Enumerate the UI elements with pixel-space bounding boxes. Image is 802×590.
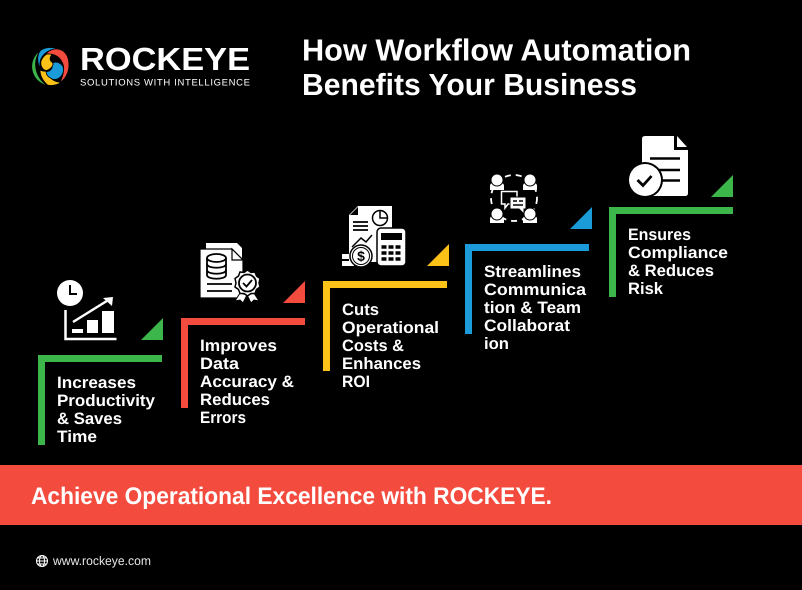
website url: www.rockeye.com (52, 554, 151, 568)
marker triangle (283, 281, 305, 303)
dollar sign: $ (357, 248, 365, 264)
panel: step 5 compliance (609, 136, 733, 298)
icon: globe (36, 556, 48, 566)
step text: Ensures (628, 226, 691, 244)
step text: Improves (200, 337, 277, 355)
title: Benefits Your Business (302, 68, 637, 102)
marker triangle (427, 244, 449, 266)
step bracket (38, 355, 162, 445)
step text: & Saves (57, 410, 122, 428)
step text: Collaborat (484, 317, 571, 335)
panel: step 1 productivity (38, 280, 163, 446)
banner text: Achieve Operational Excellence with ROCKEYE. (31, 483, 552, 510)
step text (342, 301, 439, 391)
step text: Productivity (57, 392, 156, 410)
step text: Operational (342, 319, 439, 337)
step text (57, 374, 156, 446)
logo wordmark: ROCKEYE (80, 41, 250, 77)
marker triangle (141, 318, 163, 340)
icon: compliance document (627, 136, 688, 198)
banner (0, 465, 802, 525)
step text: Accuracy & (200, 373, 294, 391)
icon: clock and growth chart (57, 280, 116, 339)
step text: Streamlines (484, 263, 581, 281)
panel: step 3 operational costs (323, 206, 449, 391)
marker triangle (570, 207, 592, 229)
step text (628, 226, 728, 298)
step text: Costs & (342, 337, 404, 355)
icon: database document with badge (200, 243, 260, 303)
step text: & Reduces (628, 262, 714, 280)
step text: Communica (484, 281, 587, 299)
step text (200, 337, 294, 427)
step text (484, 263, 587, 353)
step text: ion (484, 335, 509, 353)
panel: step 2 data accuracy (181, 243, 305, 427)
step bracket (181, 318, 305, 408)
title (302, 34, 691, 102)
step text: tion & Team (484, 299, 581, 317)
panel: step 4 communication (465, 174, 592, 353)
step text: Enhances (342, 355, 421, 373)
icon: logo swirl (32, 48, 69, 86)
step text: Data (200, 355, 240, 373)
marker triangle (711, 175, 733, 197)
step text: Cuts (342, 301, 379, 319)
icon: report, calculator and coin (342, 206, 406, 267)
icon: team collaboration (490, 174, 537, 223)
step text: Increases (57, 374, 136, 392)
logo (32, 41, 250, 88)
step bracket (465, 244, 589, 334)
step text: ROI (342, 373, 370, 391)
logo tagline: SOLUTIONS WITH INTELLIGENCE (80, 78, 250, 88)
footer website (36, 554, 151, 568)
step text: Reduces (200, 391, 270, 409)
step text: Time (57, 428, 97, 446)
step text: Errors (200, 409, 246, 427)
title: How Workflow Automation (302, 34, 691, 68)
step bracket (323, 281, 447, 371)
step bracket (609, 207, 733, 297)
step text: Risk (628, 280, 664, 298)
step text: Compliance (628, 244, 728, 262)
